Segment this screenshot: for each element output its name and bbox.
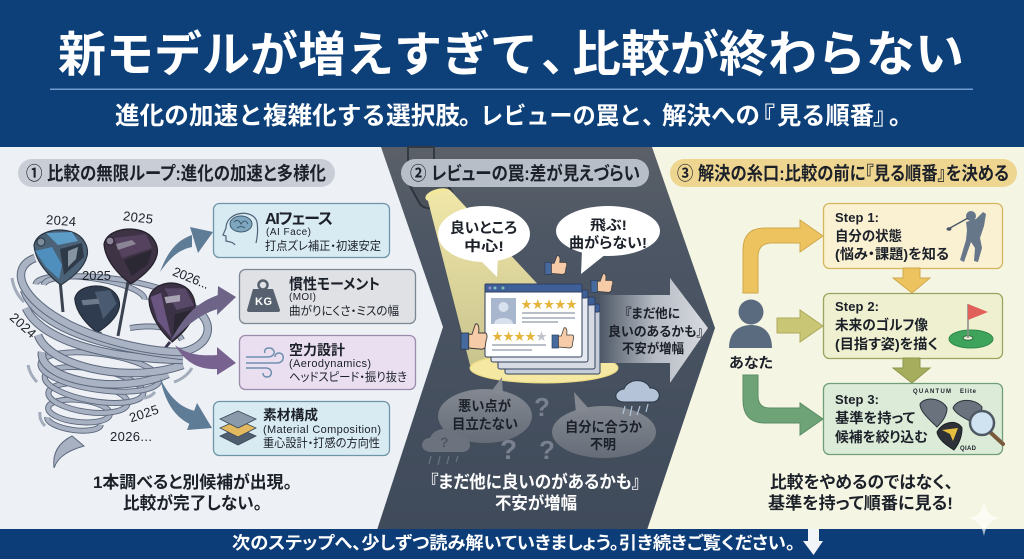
panel 2 heading: ② レビューの罠:差が見えづらい [410, 163, 640, 184]
icon: golfer [946, 211, 986, 262]
icon: golf flag [949, 304, 993, 348]
label: you: あなた [729, 355, 773, 372]
panel 1 conclusion [93, 472, 292, 513]
arrow: growing anxiety: 『まだ他に [625, 306, 680, 321]
card: aerodynamics [240, 336, 416, 390]
step 3 card: 候補を絞り込む [835, 429, 928, 445]
question marks [500, 392, 555, 465]
arrow to AI face [160, 227, 213, 272]
speech bubble: it flies [556, 206, 660, 274]
spotlight beam [427, 190, 613, 365]
title [58, 28, 964, 82]
year labels: 2024 [46, 212, 77, 229]
card: moment of inertia [240, 270, 416, 324]
subtitle: 進化の加速と複雑化する選択肢 [115, 102, 461, 130]
tornado back rings [36, 269, 208, 352]
title: 比較が終わらない [572, 28, 964, 82]
driver head: 2026 violet [149, 283, 195, 352]
question marks: ? [534, 392, 550, 422]
header band [0, 0, 1024, 148]
step 2 card: (目指す姿)を描く [835, 336, 938, 352]
speech bubble: fit unknown: 不明 [590, 437, 616, 452]
panel 3: the solution [670, 159, 1017, 513]
card: AI face: AIフェース [265, 211, 333, 228]
year labels: 2025 [127, 402, 160, 425]
icon: rain cloud right [616, 381, 659, 416]
step 1 card: (悩み・課題)を知る [835, 246, 949, 262]
card: materials: 重心設計・打感の方向性 [263, 435, 380, 450]
icon: candidate drivers and magnifier: QUANTUM [913, 389, 951, 395]
subtitle: レビューの罠と [480, 103, 642, 130]
stacked review windows [485, 284, 600, 374]
icon: person [729, 300, 773, 372]
step 3 card: 基準を持って [835, 410, 915, 426]
step 2 card [824, 294, 1002, 358]
panel 1 heading [18, 159, 335, 187]
step 2 card: Step 2: [835, 299, 879, 314]
card: AI face: 打点ズレ補正・初速安定 [265, 238, 381, 253]
panel 1: infinite comparison loop [7, 159, 416, 513]
icon: down arrow [803, 529, 823, 555]
panel 2 conclusion: 不安が増幅 [495, 493, 577, 513]
panel 2 heading [401, 159, 649, 187]
step 1 card: 自分の状態 [835, 228, 902, 244]
year labels: 2026... [110, 429, 152, 444]
panel 2: review trap [401, 147, 708, 513]
year labels [7, 208, 212, 444]
card: moment of inertia: (MOI) [289, 292, 316, 303]
icon: rain cloud left: ? [440, 434, 449, 450]
icon: KG weight [247, 280, 280, 312]
step 3 card [824, 384, 1003, 454]
star ratings: ★★★★★ [521, 299, 577, 311]
card: aerodynamics: ヘッドスピード・振り抜き [289, 370, 407, 384]
panel 3 conclusion [768, 473, 953, 513]
title: 、 [541, 29, 589, 82]
driver head: 2025 dark navy [75, 286, 120, 345]
icon: candidate drivers and magnifier: QIAD [960, 446, 977, 452]
subtitle: 。 [889, 103, 913, 130]
question marks: ? [500, 434, 517, 465]
icon: spotlight fixture [402, 147, 452, 208]
review window contents [488, 286, 577, 350]
speech bubble: downsides hidden: 悪い点が [458, 398, 511, 414]
step 1 card [824, 204, 1002, 268]
speech bubble: it flies: 飛ぶ! [590, 217, 627, 233]
step 1 card: Step 1: [835, 210, 879, 225]
light pool [470, 353, 618, 383]
subtitle [115, 102, 913, 130]
subtitle: 『 [751, 103, 775, 130]
year labels: 2024 [7, 310, 39, 341]
arrow: you to step 1 [743, 220, 823, 293]
golf driver heads [34, 229, 195, 352]
speech bubble: downsides hidden [438, 377, 532, 443]
subtitle: 見る順番 [777, 102, 874, 130]
panel 1 heading: ① 比較の無限ループ:進化の加速と多様化 [26, 163, 326, 184]
card: aerodynamics: 空力設計 [289, 342, 345, 358]
panel backgrounds [0, 147, 1024, 530]
icon: rain cloud left [422, 429, 470, 465]
panel 1 conclusion: 比較が完了しない。 [123, 493, 262, 513]
card: AI face: (AI Face) [266, 227, 311, 238]
card: aerodynamics: (Aerodynamics) [289, 358, 371, 370]
panel 3 conclusion: 比較をやめるのではなく、 [770, 473, 953, 492]
icon: wind [246, 348, 283, 377]
speech bubble: it flies: 曲がらない! [569, 234, 647, 252]
footer band [0, 529, 1024, 559]
panel 2 conclusion [430, 472, 640, 513]
title: 新モデルが増えすぎて [58, 29, 538, 82]
year labels: 2026... [171, 264, 212, 292]
driver head: 2024 blue [34, 230, 87, 312]
speech bubble: fit unknown: 自分に合うか [565, 419, 642, 435]
arrow to aerodynamics [175, 345, 236, 375]
subtitle: 』 [873, 103, 897, 130]
panel 1 conclusion: 1本調べると別候補が出現。 [93, 472, 292, 492]
speech bubble: downsides hidden: 目立たない [452, 416, 518, 432]
speech bubble: mostly positives [438, 206, 530, 277]
decorative sparkle [968, 502, 1000, 536]
arrow: growing anxiety: 良いのあるかも』 [608, 324, 703, 339]
card: moment of inertia: 慣性モーメント [289, 275, 380, 293]
arrow: growing anxiety: 不安が増幅 [622, 341, 684, 356]
arrow to materials [160, 378, 212, 430]
year labels: 2025 [122, 208, 154, 227]
arrow: growing anxiety [600, 278, 708, 383]
card: materials: (Material Composition) [263, 424, 381, 436]
reviewer avatar [491, 298, 516, 324]
arrow: you to step 2 [777, 310, 823, 342]
icon: candidate drivers and magnifier: Elite [960, 389, 977, 395]
review window contents: ★★★★ [492, 331, 536, 343]
speech bubble: fit unknown [552, 392, 656, 458]
speech bubble: mostly positives: 良いところ [450, 219, 517, 237]
icon: material layers [220, 411, 256, 445]
card: materials: 素材構成 [263, 407, 318, 423]
subtitle: 。 [459, 103, 483, 130]
speech bubble: mostly positives: 中心! [464, 238, 504, 254]
step 2 card: 未来のゴルフ像 [835, 317, 928, 333]
arrow: you to step 3 [743, 375, 823, 435]
down arrow: step 1 to step 2 [893, 268, 930, 293]
thumbs-up icons [461, 256, 613, 349]
down arrow: step 2 to step 3 [893, 358, 930, 383]
question marks: ? [539, 435, 555, 465]
driver head: 2025 purple [104, 229, 157, 336]
subtitle: 解決への [662, 102, 760, 130]
header divider [50, 88, 973, 90]
card: materials [214, 402, 390, 456]
review window contents: ★ [536, 331, 547, 343]
arrow to MOI [170, 286, 236, 342]
year labels: 2025 [82, 268, 111, 283]
card: moment of inertia: 曲がりにくさ・ミスの幅 [289, 303, 399, 318]
subtitle: 、 [642, 103, 666, 130]
step 3 card: Step 3: [835, 392, 879, 407]
panel 3 conclusion: 基準を持って順番に見る! [768, 493, 953, 513]
panel 2 conclusion: 『まだ他に良いのがあるかも』 [430, 472, 640, 492]
card: AI face [214, 204, 390, 258]
tornado front rings [12, 258, 192, 468]
icon: KG weight: KG [255, 296, 272, 308]
footer text: 次のステップへ、少しずつ読み解いていきましょう。引き続きご覧ください。 [232, 533, 795, 553]
icon: candidate drivers and magnifier [913, 389, 1003, 452]
icon: brain head [223, 213, 258, 245]
